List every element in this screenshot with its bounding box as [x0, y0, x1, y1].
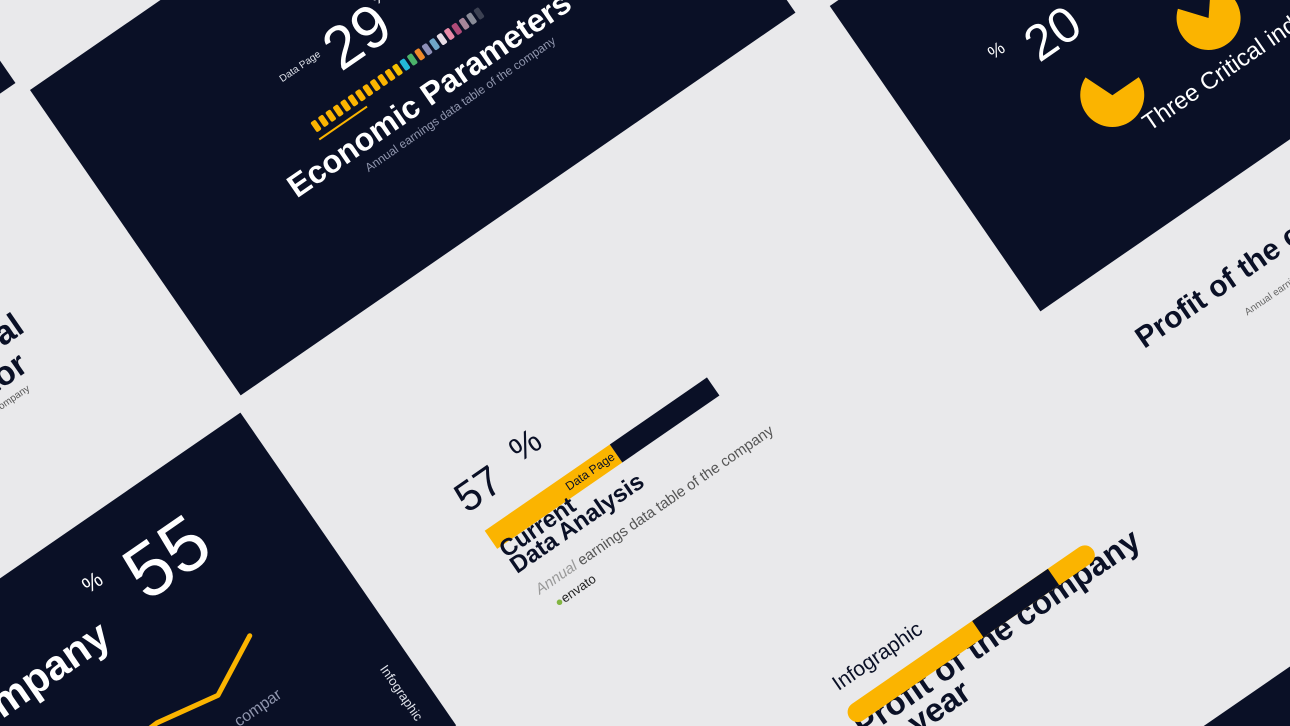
label: Infographic [828, 617, 927, 695]
percent sign: % [984, 37, 1009, 63]
line chart [148, 633, 252, 726]
pie chart 1 [1080, 77, 1144, 127]
title: Data Analysis [505, 468, 649, 579]
panel: current data analysis (light) [445, 377, 777, 610]
bar label: Data Page [563, 450, 617, 493]
big number 55: 55 [108, 498, 226, 616]
pie chart 2 [1176, 0, 1241, 50]
panel: top-left fragment [0, 0, 15, 470]
subtitle: Annual earnings data table of the company [532, 422, 777, 598]
subtitle: Annual earnings data table of the company [362, 34, 558, 175]
title: Current [494, 492, 581, 563]
panel: infographic profit (bottom light) [828, 521, 1147, 726]
logo: envato: ●envato [552, 571, 599, 610]
percent sign: % [77, 566, 107, 598]
panel: economic parameters [30, 0, 795, 395]
rounded progress bar [844, 541, 1099, 726]
percent: % [502, 421, 549, 470]
number 57: 57 [445, 456, 511, 521]
underline [319, 106, 368, 140]
panel: company 55 (dark bottom-left) [0, 413, 456, 726]
vertical label: Infographic [377, 662, 426, 724]
panel: profit of the company (right light) [1129, 153, 1290, 355]
panel: three critical (dark top-right) [830, 0, 1290, 311]
progress bar [484, 377, 720, 549]
label: data page: Data Page [278, 49, 323, 85]
panel: bottom-right dark [1183, 320, 1290, 726]
color bar strip [310, 8, 484, 132]
panel: critical indicators (left light) [0, 306, 34, 500]
